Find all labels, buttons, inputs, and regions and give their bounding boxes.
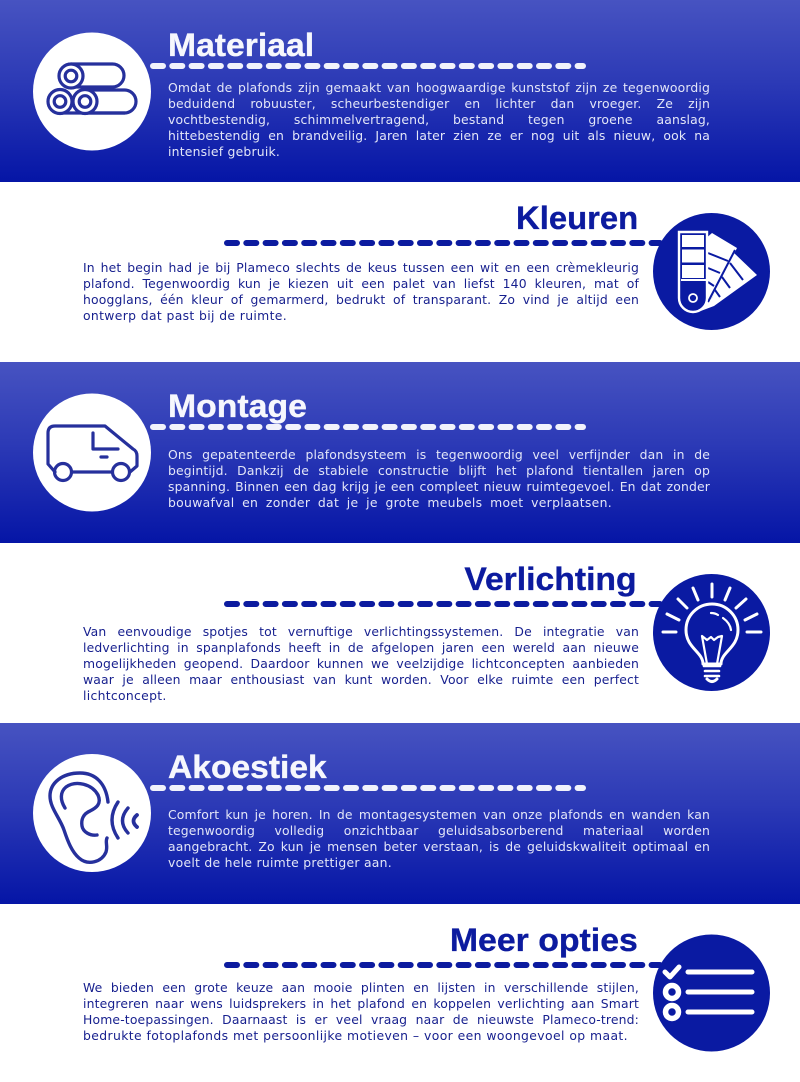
text: Materiaal description: intensief gebruik. [168, 144, 280, 159]
panel: Kleuren [0, 182, 800, 362]
text: Kleuren description: In het begin had je bij Plameco slechts de keus tussen een wit en een crèmekleurig [83, 260, 639, 275]
icon: van in circle [33, 394, 586, 512]
panel: Montage [0, 362, 800, 543]
text: Verlichting description [83, 624, 639, 703]
text: Montage description [168, 447, 710, 510]
heading: Kleuren: Kleuren [516, 200, 638, 236]
text: Meer opties description: bedrukte fotoplafonds met persoonlijke motieven – voor een woongevoel op maat. [83, 1028, 628, 1043]
text: Kleuren description: hoogglans, één kleur of gemarmerd, bedrukt of transparant. Zo vind je altijd een [83, 292, 639, 307]
text: Montage description: begintijd. Dankzij de stabiele constructie blijft het plafond tientallen jaren op [168, 463, 710, 478]
panel: Materiaal [0, 0, 800, 182]
icon: colour fan in circle [224, 213, 770, 330]
text: Meer opties description: We bieden een grote keuze aan mooie plinten en lijsten in verschillende stijlen, [83, 980, 639, 995]
heading: Verlichting: Verlichting [465, 561, 637, 597]
text: Materiaal description: hittebestendig en brandveilig. Jaren later zien ze er nog uit als nieuw, ook na [168, 128, 710, 143]
text: Montage description: bouwafval en zonder dat je je grote meubels moet verplaatsen. [168, 495, 612, 510]
icon: stacked pipes in circle [33, 32, 586, 150]
text: Verlichting description: ledverlichting in spanplafonds heeft in de afgelopen jaren een wereld aan nieuwe [83, 640, 639, 655]
text: Materiaal description [168, 80, 710, 159]
text: Meer opties description: integreren naar wens luidsprekers in het plafond en koppelen verlichting aan Smart [83, 996, 639, 1011]
panel: Akoestiek [0, 723, 800, 904]
text: Materiaal description: Omdat de plafonds zijn gemaakt van hoogwaardige kunststof zijn ze tegenwoordig [168, 80, 710, 95]
text: Montage description: spanning. Binnen een dag krijg je een compleet nieuw ruimtegevoel. En dat zonder [168, 479, 710, 494]
heading: Montage: Montage [168, 388, 307, 424]
text: Verlichting description: lichtconcept. [83, 688, 167, 703]
text: Meer opties description: Home-toepassingen. Daarnaast is er veel vraag naar de nieuwste Plameco-trend: [83, 1012, 639, 1027]
text: Montage description: Ons gepatenteerde plafondsysteem is tegenwoordig veel verfijnder dan in de [168, 447, 710, 462]
icon: checklist in circle [224, 934, 770, 1052]
text: Akoestiek description [168, 807, 710, 870]
text: Verlichting description: mogelijkheden geopend. Daardoor kunnen we veelzijdige lichtconcepten aanbieden [83, 656, 639, 671]
text: Akoestiek description: aangebracht. Zo kun je mensen beter verstaan, is de geluidskwaliteit optimaal en [168, 839, 710, 854]
text: Kleuren description: plafond. Tegenwoordig kun je kiezen uit een palet van liefst 140 kleuren, mat of [83, 276, 639, 291]
text: Akoestiek description: Comfort kun je horen. In de montagesystemen van onze plafonds en wanden kan [168, 807, 710, 822]
text: Akoestiek description: voelt de hele ruimte prettiger aan. [168, 855, 392, 870]
panel: Verlichting [0, 543, 800, 723]
text: Kleuren description: ontwerp dat past bij de ruimte. [83, 308, 287, 323]
heading: Akoestiek: Akoestiek [168, 749, 327, 785]
text: Materiaal description: vochtbestendig, schimmelvertragend, bestand tegen groene aanslag, [168, 112, 710, 127]
text: Verlichting description: Van eenvoudige spotjes tot vernuftige verlichtingssystemen. De integratie van [83, 624, 639, 639]
text: Verlichting description: waar je alleen maar enthousiast van kunt worden. Voor elke ruimte een perfect [83, 672, 639, 687]
icon: ear with sound waves in circle [33, 754, 586, 872]
text: Meer opties description [83, 980, 639, 1043]
heading: Meer opties: Meer opties [450, 922, 638, 958]
text: Kleuren description [83, 260, 640, 323]
text: Materiaal description: beduidend robuuster, scheurbestendiger en lichter dan vroeger. Ze zijn [168, 96, 710, 111]
text: Akoestiek description: tegenwoordig volledig onzichtbaar geluidsabsorberend materiaal worden [168, 823, 710, 838]
icon: light bulb in circle [224, 574, 770, 691]
panel: Meer opties [0, 904, 800, 1082]
heading: Materiaal: Materiaal [168, 27, 314, 63]
